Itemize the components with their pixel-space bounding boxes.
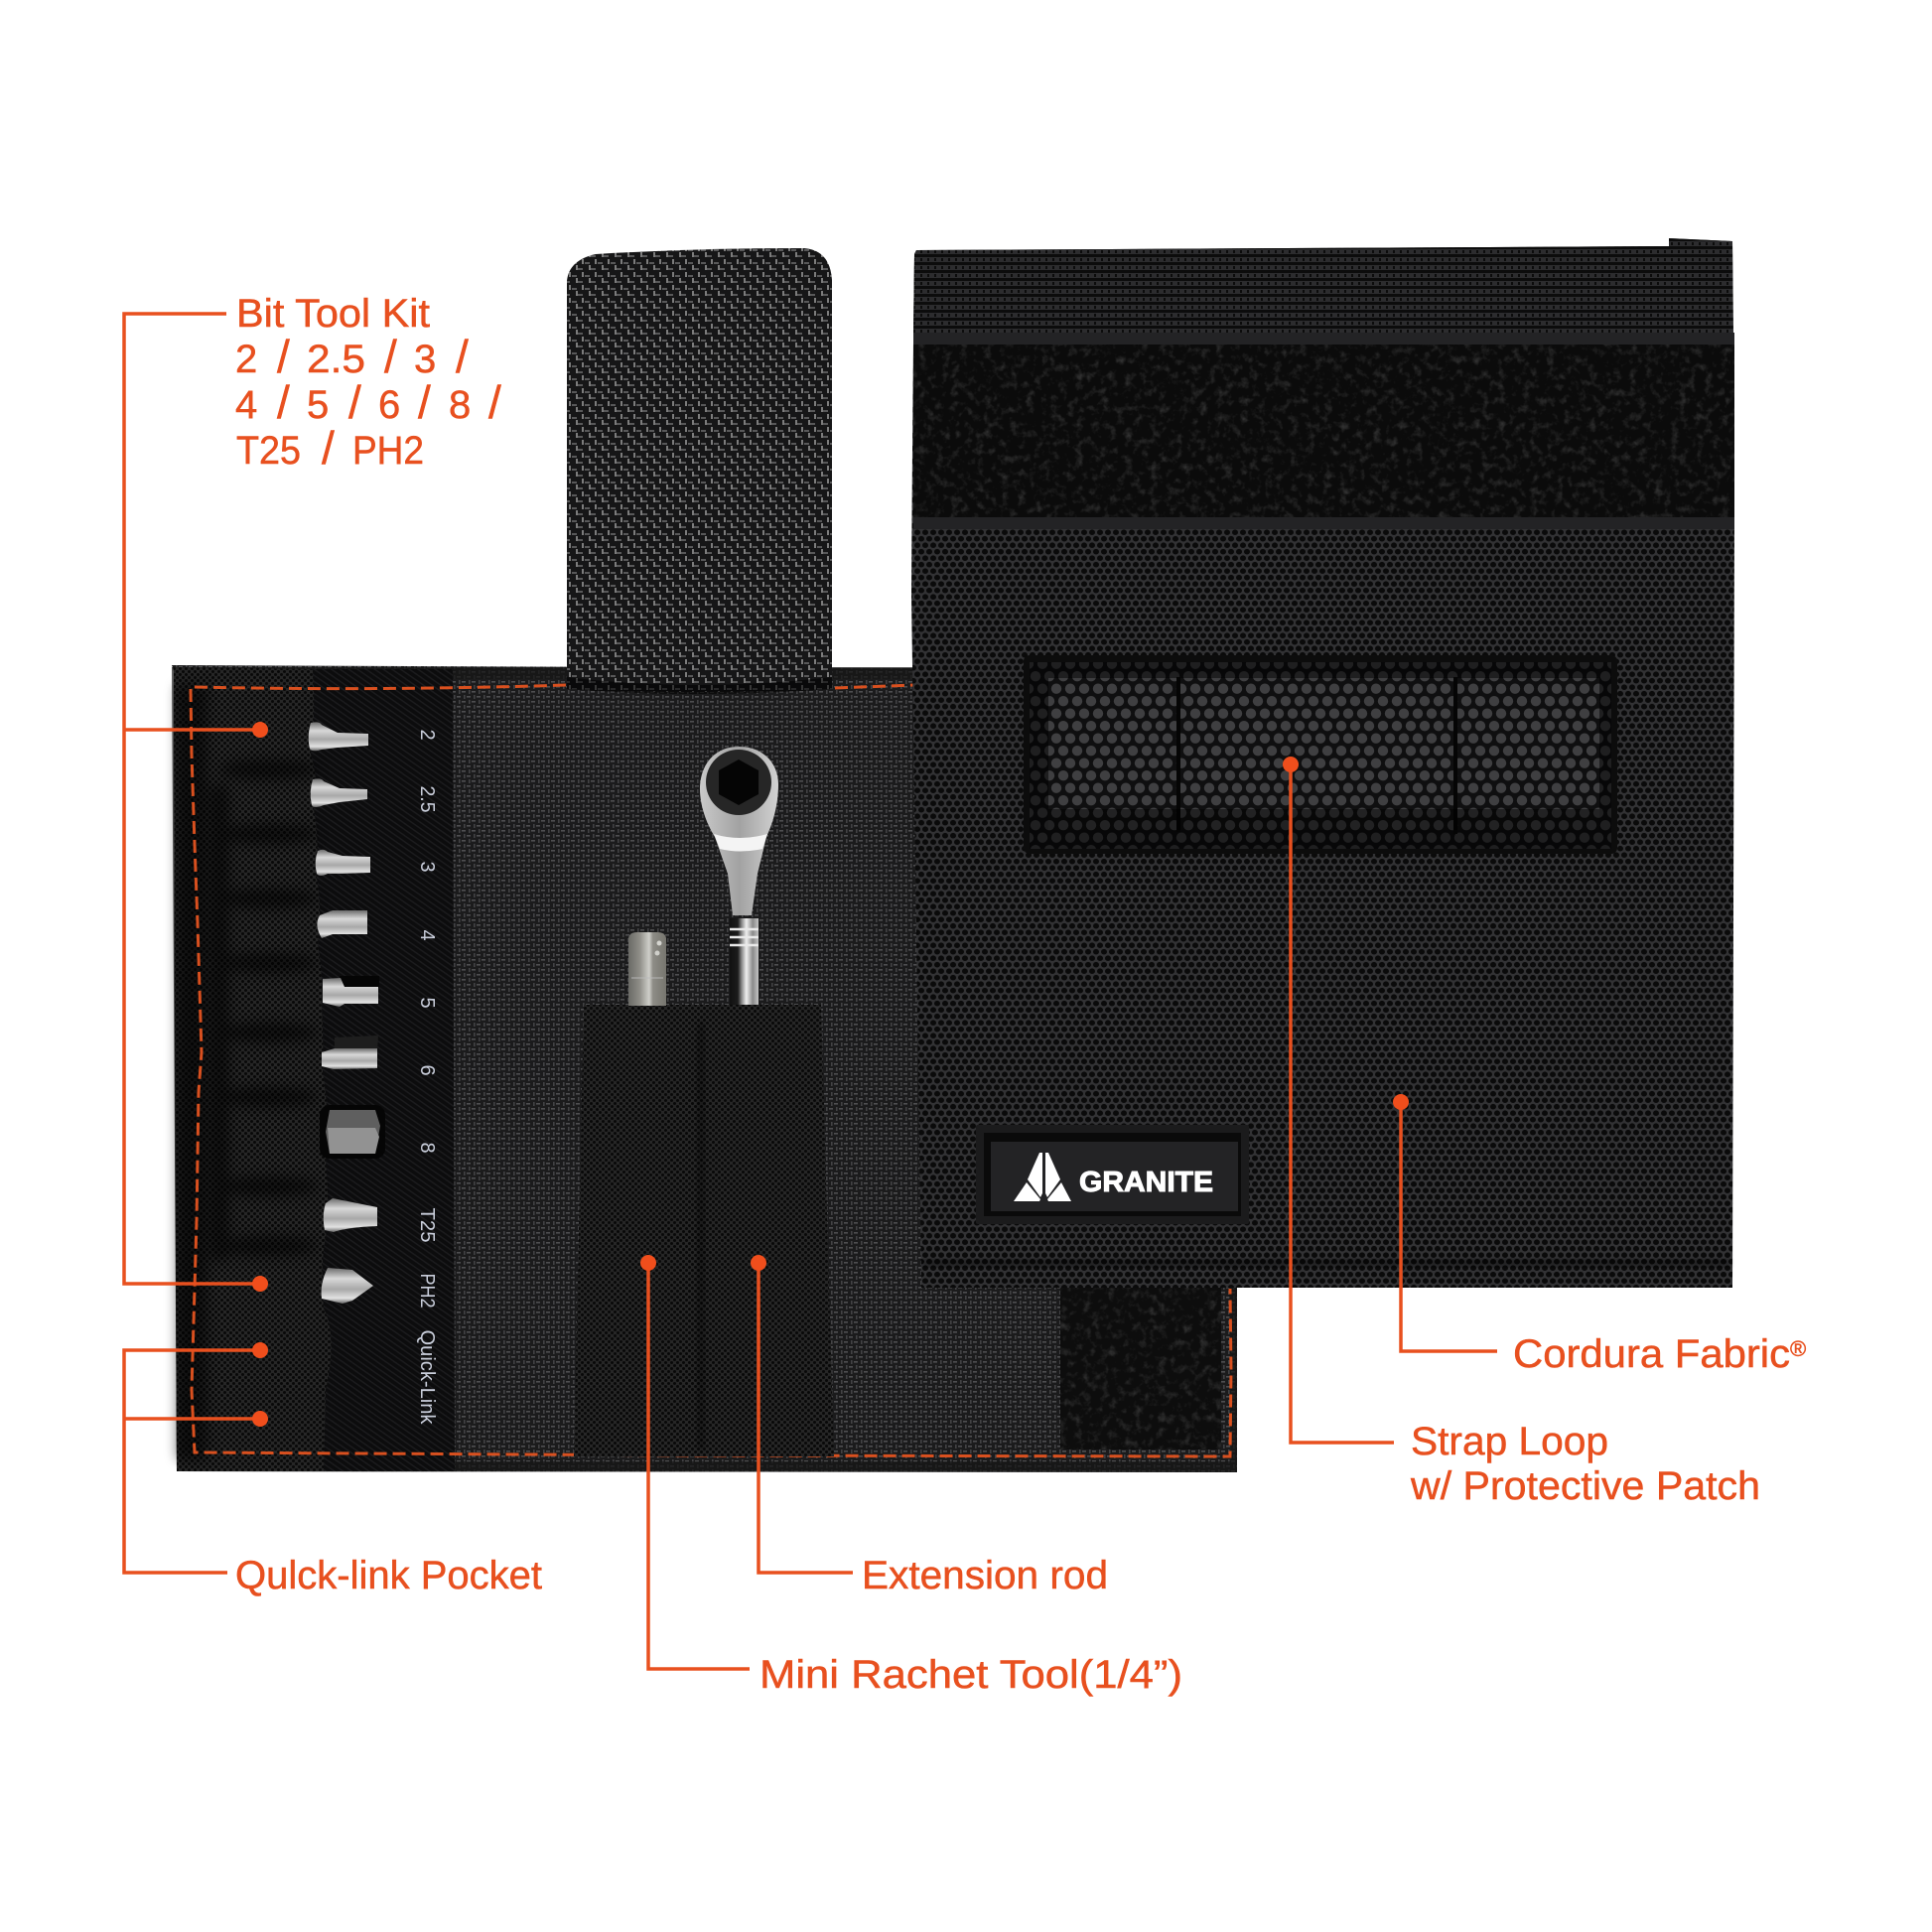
callout: strap loop: w/ Protective Patch: [1410, 1464, 1760, 1508]
callout: bit tool kit: 2: [235, 338, 257, 381]
velcro strip on left panel: [1060, 1287, 1221, 1449]
bit label column: 3: [416, 861, 438, 873]
callout: mini rachet tool: [640, 1255, 1182, 1697]
patch lower shadow: [1048, 809, 1599, 830]
patch inner groove: [1030, 662, 1611, 849]
bit T25: [324, 1198, 377, 1232]
icon: extension rod: [628, 932, 666, 1006]
patch stitches: [1178, 677, 1455, 834]
bit 8: [320, 1105, 385, 1159]
elastic bit pockets: [174, 667, 332, 1471]
callout: bit tool kit: 2.5: [307, 338, 365, 381]
callout: bit tool kit: /: [277, 331, 290, 382]
callout: cordura fabric: ®: [1790, 1336, 1806, 1361]
bit 2: [309, 722, 368, 751]
bit PH2: [322, 1268, 373, 1304]
callout: bit tool kit: /: [488, 376, 501, 428]
brand name: GRANITE: [1079, 1167, 1213, 1198]
callout: bit tool kit: /: [322, 422, 335, 474]
bit 5: [340, 976, 379, 988]
callout: quick-link pocket: Qulck-link Pocket: [235, 1554, 542, 1597]
bit 6: [335, 1035, 378, 1052]
bit label column: 8: [416, 1142, 438, 1154]
icon: granite mountain mark: [1014, 1153, 1071, 1201]
left panel base fabric: [172, 665, 1237, 1472]
bit label column: PH2: [416, 1273, 438, 1309]
bit 4: [317, 910, 367, 938]
bit label column: 2: [416, 729, 438, 741]
bit 3: [316, 850, 370, 876]
bit label column: 5: [416, 997, 438, 1009]
panel: left tool roll: [172, 665, 1237, 1472]
callout: bit tool kit: /: [277, 376, 290, 428]
callout: bit tool kit: 3: [414, 338, 436, 381]
logo badge: [976, 1125, 1249, 1224]
velcro loop pad: [913, 345, 1734, 517]
bit label column: 2.5: [416, 786, 438, 812]
orange stitching: [191, 685, 1231, 1456]
bit label column: T25: [416, 1207, 438, 1243]
velcro hook band: [913, 333, 1734, 529]
cover top band: [913, 238, 1733, 334]
callout: cordura fabric: [1393, 1094, 1806, 1376]
bit label column: [416, 729, 438, 1425]
bit 2.5: [311, 778, 367, 807]
callout: bit tool kit: 8: [449, 383, 471, 427]
strap loop with protective patch: [1024, 655, 1617, 854]
callout: quick-link pocket: [124, 1342, 542, 1597]
callout: bit tool kit: /: [418, 376, 431, 428]
callout: mini rachet tool: Mini Rachet Tool(1/4”): [759, 1653, 1182, 1697]
callout: bit tool kit: PH2: [352, 429, 424, 473]
callout: bit tool kit: /: [384, 331, 397, 382]
bottom hem shading: [923, 1259, 1729, 1267]
callout: extension rod: Extension rod: [862, 1554, 1108, 1597]
callout: bit tool kit: 5: [307, 383, 329, 427]
pocket fold shadows: [177, 685, 318, 1459]
panel: right Cordura cover: [911, 238, 1734, 1288]
callout: bit tool kit: 6: [378, 383, 400, 427]
ratchet head and neck: [700, 747, 778, 915]
callout: bit tool kit: 4: [235, 383, 257, 427]
bit label strip: [310, 669, 455, 1471]
ratchet rod: [730, 918, 759, 1005]
bit label column: 6: [416, 1064, 438, 1076]
pocket divider shadow: [697, 1023, 705, 1449]
callout: bit tool kit: [124, 292, 501, 1292]
callout: bit tool kit: /: [348, 376, 361, 428]
left panel outer binding: [172, 667, 1237, 1472]
callout: strap loop: Strap Loop: [1411, 1420, 1608, 1463]
bits set: [309, 722, 385, 1304]
bit label column: 4: [416, 929, 438, 941]
ratchet socket: [706, 750, 771, 815]
bit label column: Quick-Link: [416, 1330, 438, 1425]
callout: strap loop: [1283, 757, 1760, 1508]
icon: mini ratchet tool: [700, 747, 778, 1005]
callout: extension rod: [751, 1255, 1108, 1597]
callout: cordura fabric: Cordura Fabric: [1513, 1332, 1790, 1376]
panel: elastic tool pocket: [574, 1005, 834, 1456]
tab bottom shadow: [567, 677, 832, 694]
callout: bit tool kit: /: [456, 331, 469, 382]
panel: closure tab: [567, 248, 832, 694]
callout: bit tool kit: Bit Tool Kit: [236, 292, 430, 336]
callout: bit tool kit: T25: [236, 429, 301, 473]
